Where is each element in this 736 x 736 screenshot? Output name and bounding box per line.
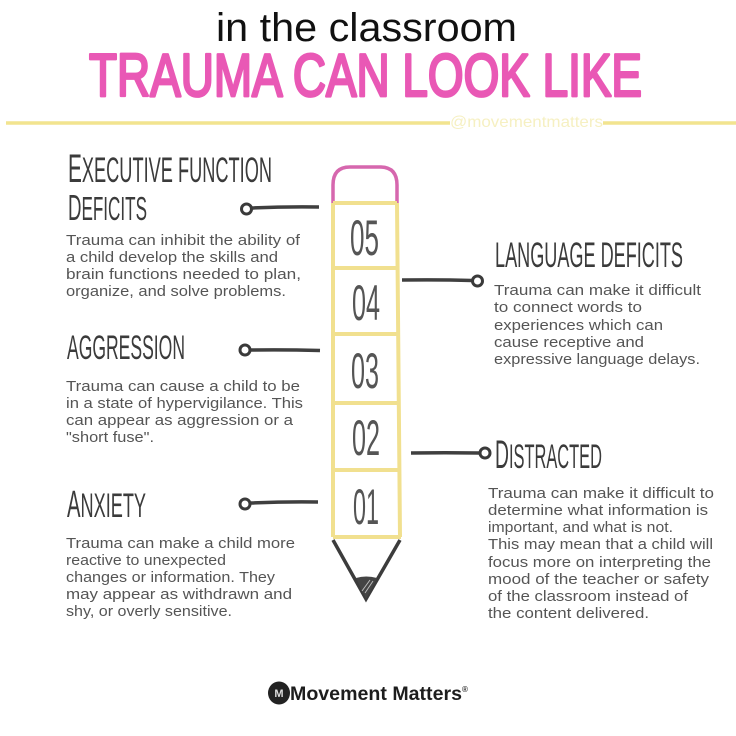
icon: brain badge [268, 682, 290, 704]
text: distracted description: Trauma can make it difficult to [488, 485, 714, 502]
text: language deficits description: experiences which can [494, 317, 663, 334]
heading: aggression: AGGRESSION [67, 329, 185, 367]
segment number 03: 03 [351, 343, 379, 399]
text: executive function description [66, 232, 301, 300]
pencil tip [333, 540, 400, 599]
logo wordmark: Movement Matters [290, 684, 462, 705]
connector: aggression [240, 345, 320, 355]
segment number 05: 05 [350, 210, 379, 266]
text: anxiety description: changes or information. They [66, 569, 276, 586]
pencil eraser [333, 167, 397, 203]
text: anxiety description: Trauma can make a child more [66, 535, 295, 552]
text: language deficits description [494, 282, 702, 368]
heading: distracted: DISTRACTED [495, 433, 602, 477]
segment number 04: 04 [352, 275, 380, 331]
text: distracted description: important, and what is not. [488, 519, 673, 536]
text: aggression description: can appear as aggression or a [66, 412, 294, 429]
connector: anxiety [240, 499, 318, 509]
divider with watermark: @movementmatters [450, 114, 603, 131]
panel: executive function deficits [66, 147, 319, 300]
heading: executive function: EXECUTIVE FUNCTION [68, 147, 272, 191]
logo: movement matters [268, 682, 468, 705]
text: distracted description [488, 485, 714, 622]
chart: pencil with numbered segments: 01 [353, 479, 379, 535]
panel: language deficits [402, 236, 702, 368]
text: executive function description: brain functions needed to plan, [66, 266, 301, 283]
connector: distracted [411, 448, 490, 458]
text: language deficits description: to connect words to [494, 299, 642, 316]
icon: brain badge: M [274, 688, 284, 700]
registered mark: ® [462, 685, 468, 694]
panel: aggression [66, 329, 320, 446]
text: distracted description: the content delivered. [488, 605, 649, 622]
text: executive function description: organize, and solve problems. [66, 283, 286, 300]
chart: pencil with numbered segments [333, 167, 401, 599]
text: aggression description: Trauma can cause a child to be [66, 378, 300, 395]
text: distracted description: determine what information is [488, 502, 708, 519]
segment number 02: 02 [352, 410, 380, 466]
text: distracted description: of the classroom instead of [488, 588, 689, 605]
text: language deficits description: cause receptive and [494, 334, 644, 351]
connector: language deficits [402, 276, 482, 286]
text: executive function description: Trauma can inhibit the ability of [66, 232, 301, 249]
text: aggression description: in a state of hypervigilance. This [66, 395, 303, 412]
text: anxiety description: reactive to unexpected [66, 552, 226, 569]
text: executive function description: a child develop the skills and [66, 249, 278, 266]
text: anxiety description: may appear as withdrawn and [66, 586, 292, 603]
text: aggression description: "short fuse". [66, 429, 154, 446]
panel: anxiety [66, 484, 318, 620]
text: language deficits description: Trauma can make it difficult [494, 282, 702, 299]
text: distracted description: mood of the teacher or safety [488, 571, 710, 588]
connector: executive function [242, 204, 319, 214]
heading: deficits: DEFICITS [68, 187, 147, 228]
text: language deficits description: expressive language delays. [494, 351, 700, 368]
panel: distracted [411, 433, 714, 622]
text: anxiety description: shy, or overly sensitive. [66, 603, 232, 620]
text: distracted description: This may mean that a child will [488, 536, 713, 553]
title: in the classroom: in the classroom [216, 6, 517, 50]
text: anxiety description [66, 535, 295, 620]
pencil body [333, 203, 401, 537]
text: distracted description: focus more on interpreting the [488, 554, 711, 571]
text: aggression description [66, 378, 303, 446]
heading: anxiety: ANXIETY [67, 484, 146, 526]
